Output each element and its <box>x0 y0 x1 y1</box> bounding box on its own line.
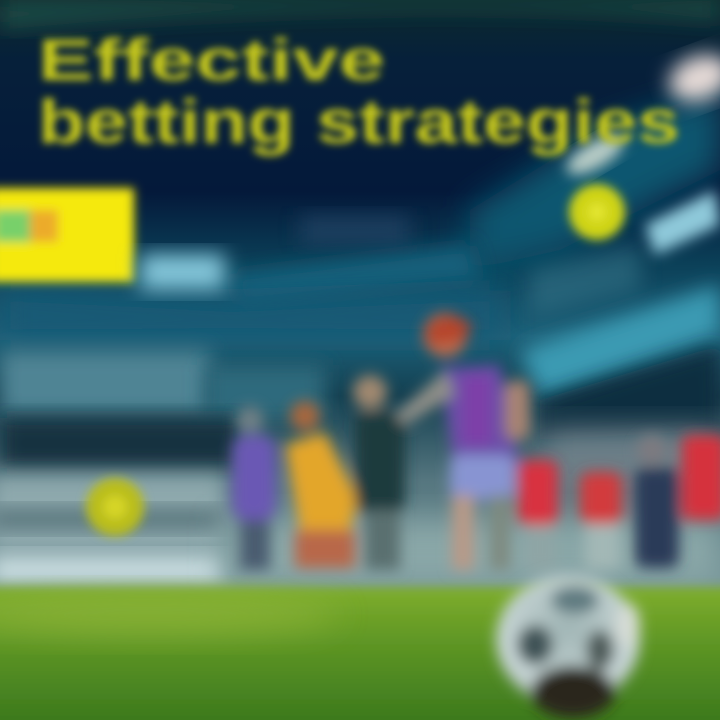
player: red right <box>682 435 720 520</box>
green chip <box>0 210 30 242</box>
player: purple left <box>232 406 276 570</box>
icon: yellow coin left <box>86 478 144 536</box>
yellow callout panel <box>0 188 134 282</box>
title line 2: betting strategies <box>38 88 680 157</box>
player: purple main <box>395 313 530 570</box>
title <box>38 28 680 157</box>
orange chip <box>30 210 58 242</box>
grass pitch <box>0 587 720 720</box>
icon: soccer ball <box>496 574 640 718</box>
icon: yellow coin top right <box>569 184 625 240</box>
title line 1: Effective <box>38 28 385 93</box>
player: red <box>518 460 558 570</box>
players <box>232 313 720 570</box>
player: dark centre <box>353 375 405 570</box>
player: navy <box>635 435 679 568</box>
player: red <box>580 472 622 569</box>
light blue glow label <box>140 254 225 290</box>
player: yellow <box>285 401 358 568</box>
